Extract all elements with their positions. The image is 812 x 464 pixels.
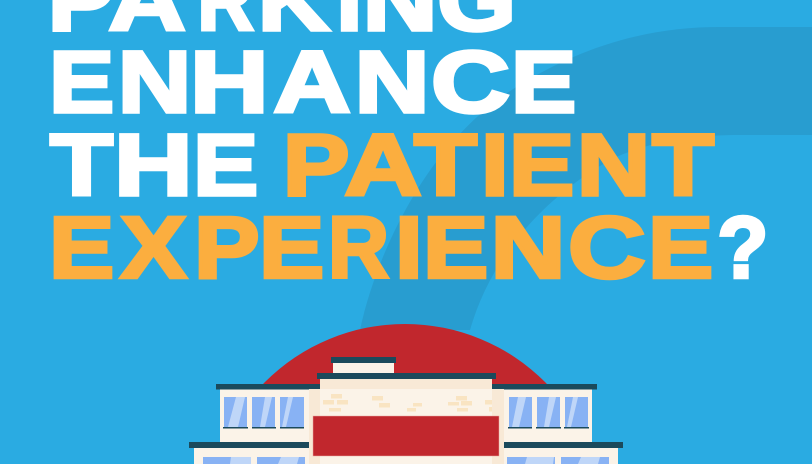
title word: THE: H bbox=[114, 117, 193, 214]
title word: EXPERIENCE: N bbox=[491, 200, 565, 297]
title word: EXPERIENCE: R bbox=[328, 200, 389, 297]
title line: ENHANCE: A bbox=[274, 34, 351, 131]
left lower wing bbox=[189, 442, 313, 464]
right upper windows bbox=[508, 397, 589, 428]
title word: EXPERIENCE: C bbox=[568, 200, 646, 297]
title word: PATIENT: N bbox=[577, 117, 650, 214]
title line: ENHANCE: H bbox=[190, 34, 269, 131]
title line: ENHANCE: C bbox=[431, 34, 510, 131]
title line: ENHANCE: N bbox=[355, 34, 429, 131]
title word: EXPERIENCE: E bbox=[423, 200, 488, 297]
brick details bbox=[323, 394, 492, 412]
title word: EXPERIENCE: X bbox=[120, 200, 186, 297]
right upper wing bbox=[492, 384, 597, 443]
left upper wing bbox=[216, 384, 321, 443]
hospital building bbox=[189, 357, 623, 464]
title word: EXPERIENCE: E bbox=[49, 200, 114, 297]
title line: ENHANCE: N bbox=[118, 34, 191, 131]
red banner bbox=[313, 416, 499, 456]
rooftop unit bbox=[331, 357, 396, 373]
left upper windows bbox=[223, 397, 304, 428]
left lower windows bbox=[203, 457, 305, 464]
title question mark: ? bbox=[717, 200, 768, 297]
title line: ENHANCE: E bbox=[511, 34, 576, 131]
title line: ENHANCE: E bbox=[49, 34, 114, 131]
central tower bbox=[309, 373, 504, 464]
title word: PATIENT: A bbox=[344, 117, 422, 214]
title word: THE: T bbox=[50, 117, 113, 214]
title word: PATIENT: P bbox=[283, 117, 349, 214]
title word: PATIENT: E bbox=[509, 117, 574, 214]
title bbox=[48, 0, 768, 297]
title word: PATIENT: T bbox=[652, 117, 714, 214]
right lower windows bbox=[507, 457, 609, 464]
title word: PATIENT: I bbox=[481, 117, 509, 214]
title word: EXPERIENCE: P bbox=[194, 200, 259, 297]
title word: EXPERIENCE: E bbox=[259, 200, 324, 297]
background shape: large faint numeral bbox=[360, 27, 812, 330]
title word: PATIENT: T bbox=[414, 117, 477, 214]
title word: EXPERIENCE: I bbox=[395, 200, 423, 297]
title word: EXPERIENCE: E bbox=[648, 200, 713, 297]
right lower wing bbox=[499, 442, 623, 464]
title word: THE: E bbox=[193, 117, 258, 214]
red dome behind hospital bbox=[207, 324, 603, 464]
